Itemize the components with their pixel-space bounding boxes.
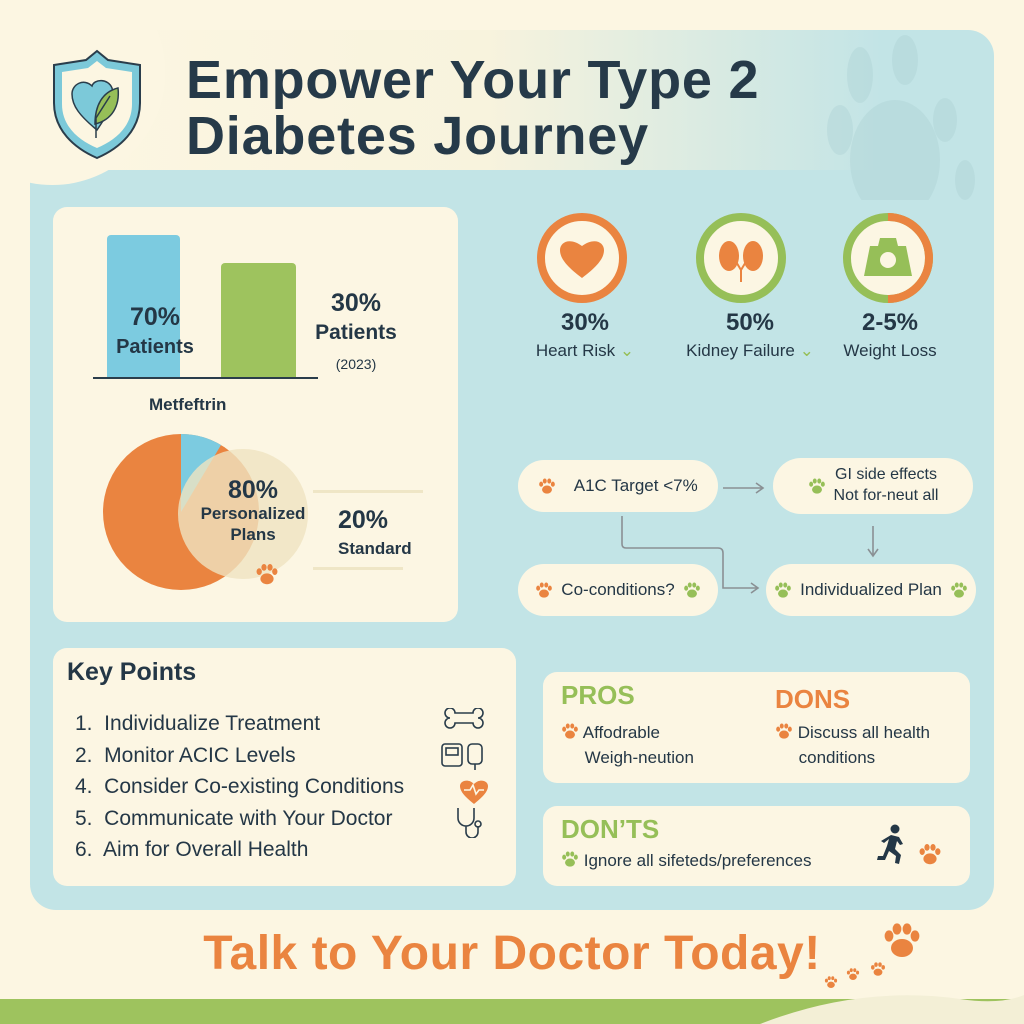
title: Diabetes Journey (186, 106, 649, 166)
icon: shield with heart and leaf (53, 50, 141, 160)
panel: don'ts: DON’TS (561, 814, 659, 844)
panel: key points: Key Points (67, 658, 196, 686)
flowchart (518, 458, 976, 616)
header band (70, 30, 994, 170)
title (186, 50, 759, 166)
panel: pros/cons: Discuss all health (798, 723, 930, 742)
pill: GI (773, 458, 973, 514)
panel: don'ts: Ignore all sifeteds/preferences (584, 851, 811, 870)
footer strip (0, 995, 1024, 1024)
header circle (0, 0, 165, 185)
panel: pros/cons: conditions (799, 748, 875, 767)
panel: risk stats: 50% (726, 309, 774, 336)
icons (441, 708, 488, 838)
title: Empower Your Type 2 (186, 50, 759, 110)
footer cta: Talk to Your Doctor Today! (203, 927, 821, 980)
icon: heart ring (537, 213, 627, 303)
bar chart: 30% (331, 289, 381, 317)
panel: key points: 4. Consider Co-existing Conditions (75, 775, 404, 798)
pie chart (103, 434, 423, 590)
pill: co-conditions (518, 564, 718, 616)
panel: risk stats (536, 213, 937, 360)
bar chart: 70% (130, 303, 180, 331)
pill: GI: Not for-neut all (834, 487, 938, 504)
panel: charts: 80% (228, 476, 278, 504)
panel: risk stats: Kidney Failure ⌄ (686, 341, 814, 360)
icon: runner (877, 824, 903, 864)
panel: key points: 5. Communicate with Your Doctor (75, 806, 392, 830)
panel: key points: 2. Monitor ACIC Levels (75, 744, 296, 766)
panel: charts: 20% (338, 506, 388, 534)
panel: charts: Personalized (201, 504, 305, 523)
bar chart (93, 235, 397, 414)
panel: risk stats: Heart Risk ⌄ (536, 341, 634, 360)
pill: A1C: A1C Target <7% (574, 476, 698, 495)
icon: paw (256, 564, 278, 584)
panel: key points: 1. Individualize Treatment (75, 712, 320, 735)
bar chart: Patients (315, 321, 397, 344)
panel: pros/cons: DONS (775, 684, 850, 714)
bar chart: Metfeftrin (149, 395, 226, 414)
panel: pros/cons: PROS (561, 680, 635, 710)
icon: paw trail (824, 923, 920, 988)
panel: risk stats: 2-5% (862, 309, 918, 336)
pill: co-conditions: Co-conditions? (561, 580, 675, 599)
bar chart: Patients (116, 336, 194, 358)
panel: risk stats: 30% (561, 309, 609, 336)
panel: charts: Standard (338, 539, 412, 558)
panel: charts: Plans (230, 525, 276, 544)
panel: don'ts (543, 806, 970, 886)
panel: charts (53, 207, 458, 622)
panel: key points: 6. Aim for Overall Health (75, 838, 308, 861)
pill: plan (766, 564, 976, 616)
pill: A1C (518, 460, 718, 512)
panel: key points (53, 648, 516, 886)
pill: plan: Individualized Plan (800, 580, 942, 599)
icon: kidney ring (696, 213, 786, 303)
panel: risk stats: Weight Loss (843, 341, 937, 360)
panel: pros/cons: Affodrable (583, 723, 660, 742)
icon: paw watermark (827, 36, 975, 200)
panel: pros/cons: Weigh-neution (585, 748, 694, 767)
icon: scale ring (843, 213, 933, 303)
panel: pros/cons (543, 672, 970, 783)
pill: GI: GI side effects (835, 466, 937, 483)
bar chart: (2023) (336, 356, 376, 372)
